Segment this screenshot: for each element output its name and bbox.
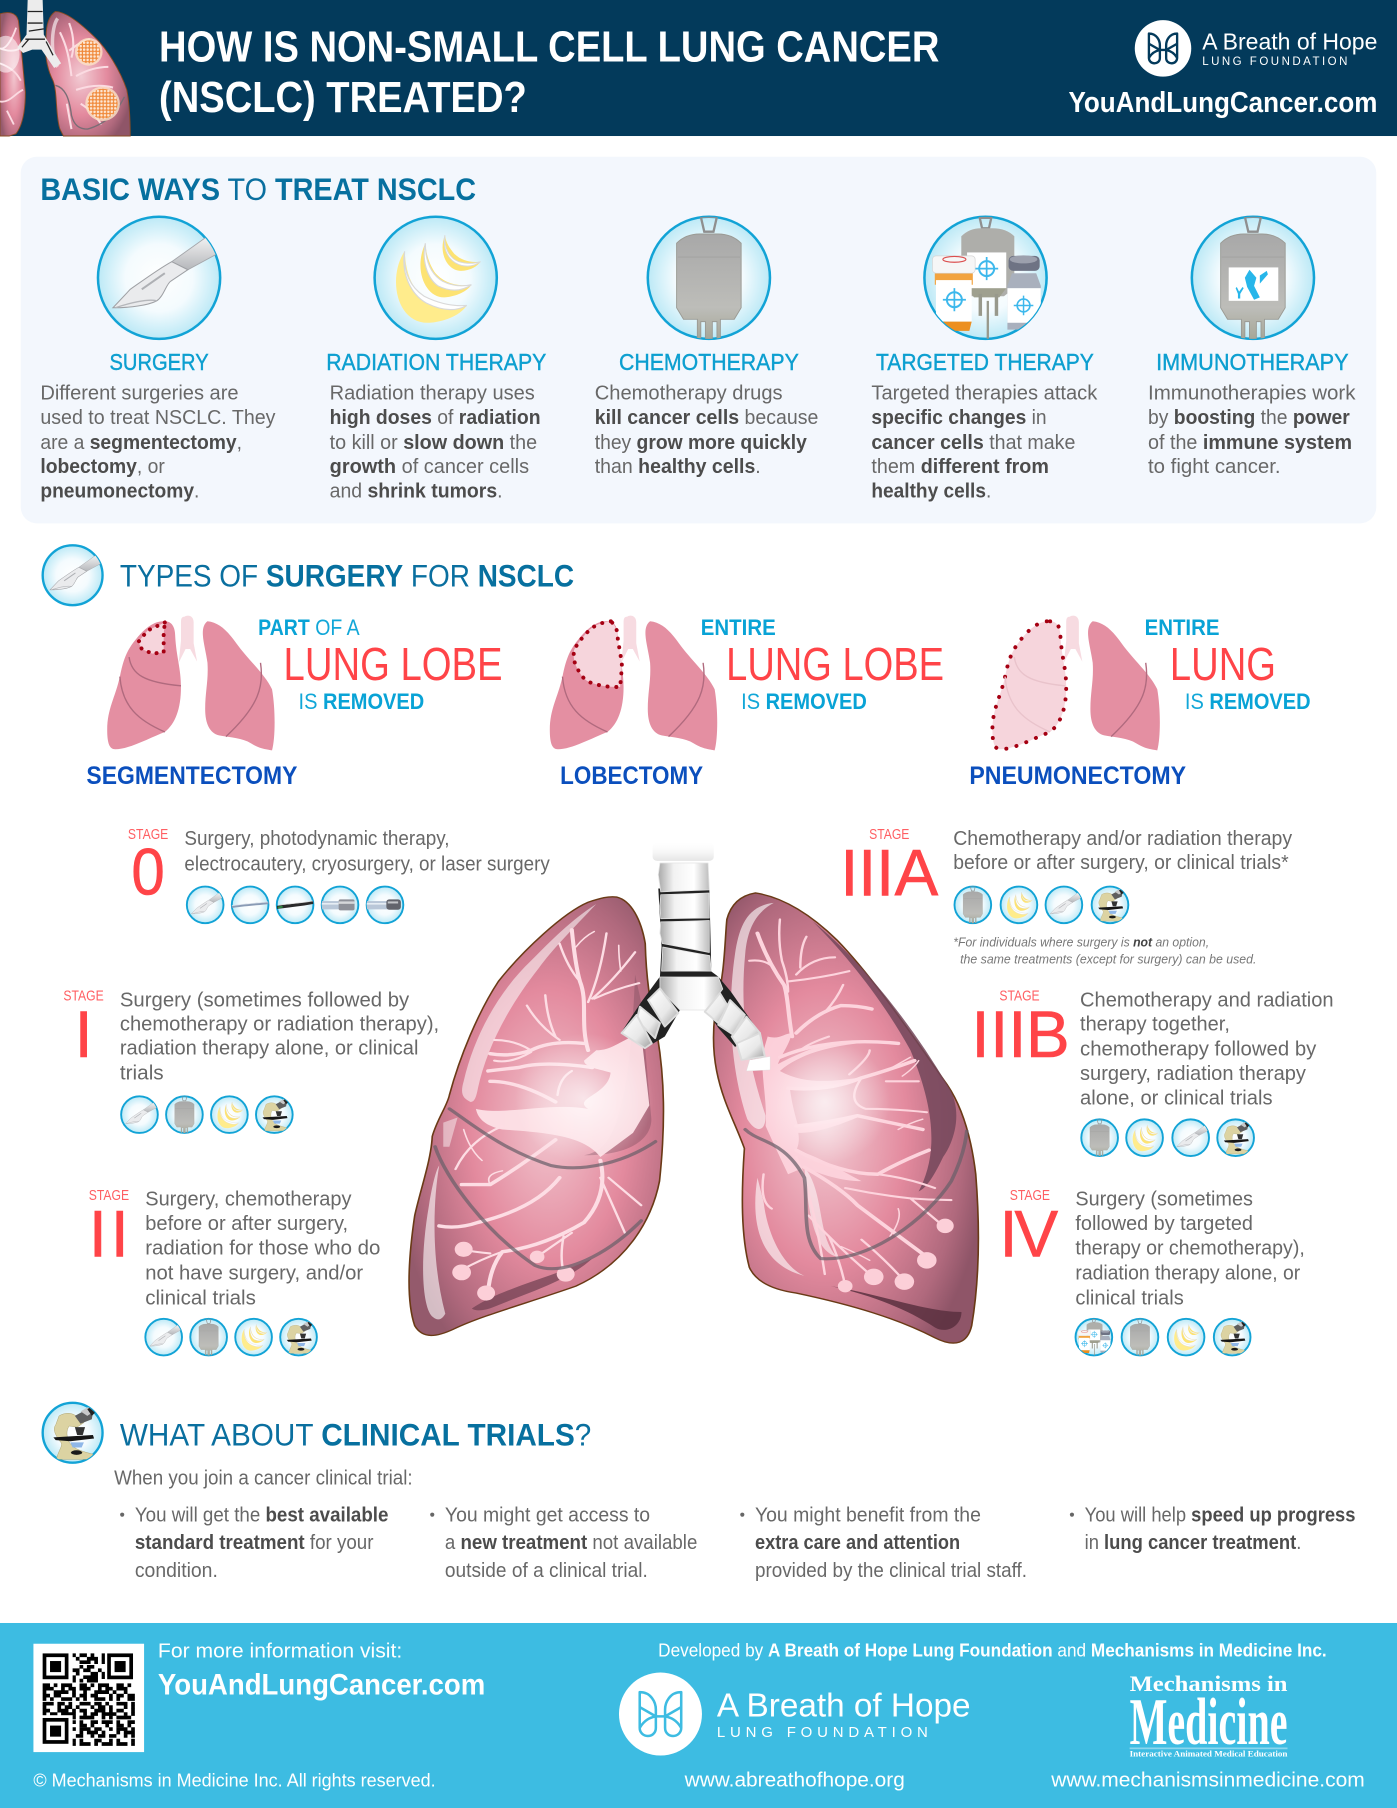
intro text: When you join a cancer clinical trial: [114, 1467, 413, 1490]
website: abreathofhope: www.abreathofhope.org [684, 1769, 905, 1792]
stage II text: not have surgery, and/or [145, 1261, 363, 1284]
bullet: best available treatment: standard treatment for your [135, 1531, 374, 1554]
bullet: new treatment: a new treatment not available [445, 1531, 697, 1554]
surgery text: used to treat NSCLC. They [40, 406, 276, 429]
immunotherapy text: by boosting the power [1148, 406, 1350, 429]
website: mechanismsinmedicine: www.mechanismsinmedicine.com [1050, 1769, 1365, 1792]
developed by: Developed by A Breath of Hope Lung Foundation and Mechanisms in Medicine Inc. [658, 1639, 1327, 1660]
footnote [953, 934, 1256, 967]
stage 0 text: Surgery, photodynamic therapy, [184, 827, 450, 850]
stage I text: radiation therapy alone, or clinical [120, 1037, 418, 1060]
header band [0, 0, 1397, 136]
stage I text: trials [120, 1061, 164, 1084]
label: entire lung is removed: IS REMOVED [1185, 689, 1311, 714]
surgery column [40, 217, 276, 502]
copyright: © Mechanisms in Medicine Inc. All rights reserved. [33, 1770, 436, 1791]
surgery text: pneumonectomy. [40, 479, 199, 502]
bullet: best available treatment: You will get the best available [135, 1504, 388, 1527]
icon: radiation [375, 217, 497, 339]
stage label: STAGE [999, 989, 1040, 1005]
stage IV text: radiation therapy alone, or [1075, 1261, 1300, 1284]
logo: Mechanisms in Medicine: Medicine [1130, 1685, 1287, 1759]
section: types of surgery [43, 545, 574, 605]
stage label: STAGE [128, 827, 168, 843]
stage label: STAGE [1010, 1188, 1050, 1204]
radiation text: Radiation therapy uses [330, 381, 535, 404]
stage I text: Surgery (sometimes followed by [120, 988, 410, 1011]
label: part of a lung lobe is removed: LUNG LOBE [284, 638, 503, 690]
section: clinical trials [43, 1403, 1356, 1582]
targeted text: cancer cells that make [871, 431, 1075, 454]
bullet: extra care: You might benefit from the [755, 1504, 981, 1527]
targeted heading: TARGETED THERAPY [876, 349, 1094, 375]
stage II text [145, 1188, 380, 1309]
stage II [89, 1188, 380, 1355]
label: entire lung is removed [1145, 615, 1311, 714]
surgery text: Different surgeries are [40, 381, 239, 404]
trachea and bronchi [621, 842, 770, 1071]
stage IIIB [971, 988, 1334, 1156]
immunotherapy text: to fight cancer. [1148, 455, 1281, 478]
chemotherapy text: than healthy cells. [595, 455, 761, 478]
stage label: IV [999, 1197, 1058, 1270]
stage label: II [89, 1197, 129, 1270]
stage I text [120, 988, 439, 1084]
immunotherapy text: Immunotherapies work [1148, 381, 1356, 404]
logo: A Breath of Hope: A Breath of Hope [1202, 29, 1377, 55]
targeted text: healthy cells. [871, 479, 991, 502]
stage II text: clinical trials [145, 1286, 256, 1309]
stage IIIA text [953, 827, 1293, 874]
logo: A Breath of Hope: LUNG FOUNDATION [1202, 56, 1347, 68]
stage IV [999, 1188, 1305, 1355]
lobectomy [550, 615, 944, 790]
treatment icons [955, 887, 1128, 923]
stage IIIB text: chemotherapy followed by [1080, 1037, 1317, 1060]
radiation therapy column [326, 217, 546, 502]
panel: basic ways to treat NSCLC [21, 157, 1376, 523]
stage IIIB text: alone, or clinical trials [1080, 1086, 1273, 1109]
visit text [158, 1640, 485, 1701]
name: PNEUMONECTOMY [969, 762, 1186, 790]
stage IIIA text: Chemotherapy and/or radiation therapy [953, 827, 1293, 850]
bullet: best available treatment [120, 1504, 388, 1582]
stage II text: Surgery, chemotherapy [145, 1188, 352, 1211]
label: part of a lung lobe is removed: IS REMOVED [299, 689, 424, 714]
treatment icons [145, 1319, 317, 1355]
targeted text: them different from [871, 455, 1049, 478]
segmentectomy [86, 615, 503, 790]
treatment icons [121, 1096, 293, 1133]
logo: A Breath of Hope: A Breath of Hope [717, 1687, 971, 1724]
stage IIIA [840, 827, 1293, 967]
radiation text: high doses of radiation [330, 406, 541, 429]
stage label: IIIB [971, 998, 1070, 1071]
stage IV text: followed by targeted [1075, 1212, 1253, 1235]
left lung [409, 897, 663, 1335]
logo: Mechanisms in Medicine: Interactive Animated Medical Education [1130, 1749, 1288, 1759]
immunotherapy column [1148, 217, 1356, 478]
bullet: speed up progress: in lung cancer treatment. [1085, 1531, 1301, 1554]
stage II text: before or after surgery, [145, 1212, 348, 1235]
title: (NSCLC) TREATED? [159, 73, 527, 122]
surgery text: lobectomy, or [40, 455, 165, 478]
stage IIIB text: surgery, radiation therapy [1080, 1062, 1307, 1085]
icon: scalpel [98, 217, 228, 339]
logo: A Breath of Hope [619, 1673, 971, 1756]
icon: lungs with tumors [0, 0, 130, 136]
radiation text: and shrink tumors. [330, 479, 503, 502]
visit text: YouAndLungCancer.com [158, 1668, 485, 1701]
stage IV text: therapy or chemotherapy), [1075, 1237, 1305, 1260]
label: part of a lung lobe is removed [258, 615, 503, 714]
lungs diagram: lobe removed [550, 616, 717, 750]
bullet: speed up progress: You will help speed up progress [1085, 1504, 1356, 1527]
label: part of a lung lobe is removed: PART OF A [258, 615, 360, 640]
radiation text: growth of cancer cells [330, 455, 529, 478]
label: entire lung is removed: LUNG [1170, 638, 1276, 690]
section heading: WHAT ABOUT CLINICAL TRIALS? [120, 1417, 591, 1452]
icon: IV bag [648, 217, 770, 339]
bullet: best available treatment: condition. [135, 1559, 218, 1582]
stage label: IIIA [840, 837, 938, 910]
stage 0 [128, 827, 550, 923]
stage IV text: clinical trials [1075, 1286, 1184, 1309]
label: entire lung lobe is removed: IS REMOVED [741, 689, 867, 714]
name: SEGMENTECTOMY [86, 762, 297, 790]
logo: Mechanisms in Medicine [1130, 1671, 1288, 1759]
targeted text: Targeted therapies attack [871, 381, 1098, 404]
QR code [33, 1644, 144, 1752]
stage label: STAGE [89, 1188, 129, 1204]
immunotherapy heading: IMMUNOTHERAPY [1156, 349, 1349, 375]
stage label: STAGE [63, 989, 104, 1005]
bullet: speed up progress [1070, 1504, 1356, 1554]
bullet: new treatment: You might get access to [445, 1504, 650, 1527]
label: entire lung lobe is removed: LUNG LOBE [726, 638, 944, 690]
visit text: For more information visit: [158, 1640, 402, 1663]
targeted text: specific changes in [871, 406, 1047, 429]
stage I text: chemotherapy or radiation therapy), [120, 1013, 439, 1036]
chemotherapy text: they grow more quickly [595, 431, 807, 454]
lungs diagram: segment removed [107, 616, 275, 750]
logo: A Breath of Hope [1135, 20, 1377, 77]
footer band [0, 1623, 1397, 1808]
targeted text [871, 381, 1098, 502]
bullet: extra care: provided by the clinical trial staff. [755, 1559, 1027, 1582]
surgery text: are a segmentectomy, [40, 431, 242, 454]
logo: A Breath of Hope: LUNG FOUNDATION [717, 1724, 928, 1741]
icon: targeted drugs [924, 217, 1047, 339]
lungs diagram: lung removed [992, 616, 1160, 750]
treatment icons [187, 887, 403, 923]
stage I [63, 988, 439, 1133]
bullet: new treatment [430, 1504, 697, 1582]
bullet: new treatment: outside of a clinical trial. [445, 1559, 648, 1582]
right lung [714, 893, 978, 1343]
radiation text [330, 381, 541, 502]
panel heading: BASIC WAYS TO TREAT NSCLC [40, 172, 476, 207]
label: entire lung lobe is removed: ENTIRE [701, 615, 776, 640]
immunotherapy text [1148, 381, 1356, 478]
stage label [63, 989, 104, 1071]
title: HOW IS NON-SMALL CELL LUNG CANCER [159, 23, 939, 72]
logo: Mechanisms in Medicine: Mechanisms in [1130, 1671, 1287, 1696]
stage 0 text [184, 827, 550, 875]
surgery text [40, 381, 276, 502]
chemotherapy text: kill cancer cells because [595, 406, 818, 429]
chemotherapy heading: CHEMOTHERAPY [619, 349, 799, 375]
stage IIIA text: before or after surgery, or clinical trials* [953, 851, 1289, 874]
stage II text: radiation for those who do [145, 1237, 380, 1260]
chemotherapy text: Chemotherapy drugs [595, 381, 783, 404]
bullet: extra care [740, 1504, 1027, 1582]
treatment icons [1081, 1119, 1254, 1156]
stage label: STAGE [869, 827, 909, 843]
label: entire lung lobe is removed [701, 615, 944, 714]
icon: scalpel small [43, 545, 107, 605]
chemotherapy text [595, 381, 818, 478]
surgery heading: SURGERY [110, 349, 209, 375]
treatment icons [1076, 1319, 1250, 1355]
pneumonectomy [969, 615, 1311, 790]
stage 0 text: electrocautery, cryosurgery, or laser surgery [184, 852, 550, 875]
icon: microscope [43, 1403, 103, 1463]
label: entire lung is removed: ENTIRE [1145, 615, 1219, 640]
footnote: the same treatments (except for surgery) can be used. [960, 952, 1256, 967]
name: LOBECTOMY [560, 762, 703, 790]
stage IIIB text: therapy together, [1080, 1013, 1230, 1036]
immunotherapy text: of the immune system [1148, 431, 1352, 454]
stage IV text [1075, 1188, 1305, 1309]
title [159, 23, 939, 122]
large lungs illustration [409, 842, 978, 1343]
stage label: I [74, 998, 93, 1071]
targeted therapy column [871, 217, 1098, 502]
stage IV text: Surgery (sometimes [1075, 1188, 1253, 1211]
stage IIIB text [1080, 988, 1334, 1109]
stage IIIB text: Chemotherapy and radiation [1080, 988, 1334, 1011]
radiation heading: RADIATION THERAPY [326, 349, 546, 375]
radiation text: to kill or slow down the [330, 431, 537, 454]
icon: immunotherapy bag [1192, 217, 1314, 339]
footnote: *For individuals where surgery is not an option, [953, 934, 1209, 949]
section heading: TYPES OF SURGERY FOR NSCLC [120, 559, 574, 594]
bullet: extra care: extra care and attention [755, 1531, 960, 1554]
chemotherapy column [595, 217, 818, 478]
stage label: 0 [131, 835, 165, 908]
